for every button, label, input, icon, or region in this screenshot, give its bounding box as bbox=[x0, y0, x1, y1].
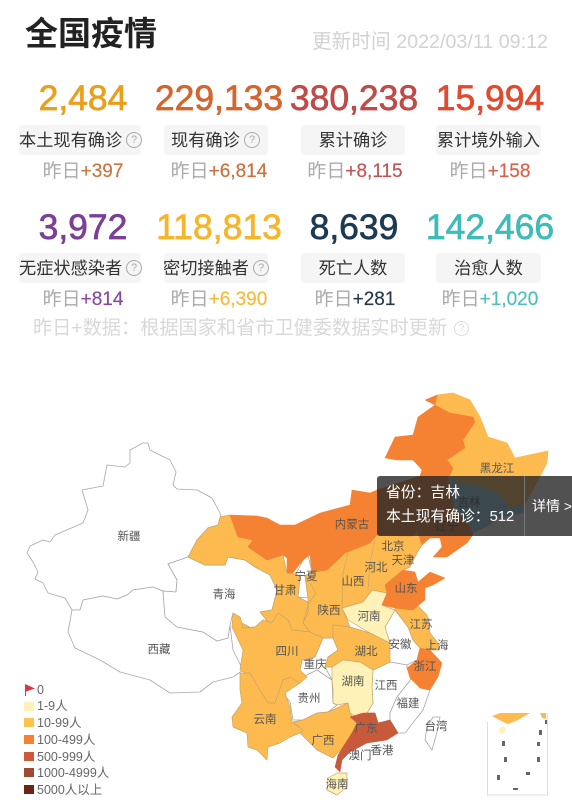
stat: imported: 15,994 bbox=[436, 78, 544, 118]
stat: local confirmed: ? bbox=[131, 134, 137, 146]
stat: deaths: 死亡人数 bbox=[319, 258, 387, 278]
province labels: 云南 bbox=[254, 712, 276, 726]
province labels: 安徽 bbox=[388, 637, 412, 651]
stat: close contacts: 密切接触者 bbox=[163, 258, 249, 278]
province labels: 吉林 bbox=[458, 495, 481, 509]
province labels: 广西 bbox=[312, 734, 334, 747]
province labels: 海南 bbox=[326, 777, 348, 791]
province labels bbox=[118, 462, 515, 791]
province: Zhejiang bbox=[407, 648, 442, 690]
province labels: 河南 bbox=[358, 609, 380, 623]
province: Henan bbox=[342, 590, 395, 643]
stat: local confirmed: 本土现有确诊 bbox=[19, 130, 122, 150]
province: Yunnan bbox=[232, 673, 303, 760]
province: Xinjiang bbox=[27, 443, 221, 610]
province labels: 重庆 bbox=[304, 657, 327, 671]
stat: deaths bbox=[301, 207, 405, 310]
province labels: 广东 bbox=[354, 722, 378, 735]
stat: cumulative confirmed: 累计确诊 bbox=[319, 130, 387, 150]
province labels: 香港 bbox=[370, 744, 394, 757]
legend: 1000-4999人 bbox=[37, 766, 109, 780]
province: Liaoning bbox=[400, 510, 473, 557]
legend: 100-499人 bbox=[37, 733, 95, 747]
province labels: 新疆 bbox=[118, 529, 141, 543]
province: Inner Mongolia bbox=[230, 395, 475, 573]
stat: close contacts: 118,813 bbox=[156, 207, 282, 247]
province labels: 山西 bbox=[342, 575, 364, 588]
province: Jilin bbox=[448, 477, 524, 533]
legend flag: 0 bbox=[25, 684, 35, 696]
province labels: 江苏 bbox=[410, 618, 432, 631]
stat: current confirmed: ? bbox=[249, 134, 255, 146]
update time: 更新时间 2022/03/11 09:12 bbox=[312, 31, 548, 53]
province labels: 河北 bbox=[364, 561, 388, 574]
province labels: 天津 bbox=[392, 554, 414, 567]
legend: 1-9人 bbox=[37, 699, 68, 713]
province labels: 江西 bbox=[374, 679, 398, 692]
province: Chongqing bbox=[300, 638, 338, 680]
province: Heilongjiang bbox=[435, 393, 548, 507]
stat: local confirmed: 昨日+397 bbox=[43, 161, 123, 182]
province: Northern plains (Shaanxi, Shanxi, Hebei, Beijing, Tianjin) bbox=[303, 530, 422, 638]
data note: 昨日+数据：根据国家和省市卫健委数据实时更新 bbox=[33, 318, 447, 339]
province: Fujian bbox=[390, 678, 430, 733]
stat: cumulative confirmed: 380,238 bbox=[290, 78, 418, 118]
stat: recovered bbox=[426, 207, 554, 310]
province: Ningxia bbox=[296, 555, 312, 598]
tooltip: Jilin bbox=[377, 476, 572, 536]
legend: 10-99人 bbox=[37, 716, 81, 730]
stat: local confirmed bbox=[19, 78, 142, 182]
province labels: 福建 bbox=[396, 696, 420, 710]
province: Taiwan bbox=[425, 717, 440, 750]
stat: asymptomatic: ? bbox=[131, 262, 137, 274]
province: Hainan bbox=[327, 773, 347, 795]
tooltip: Jilin: 省份：吉林 bbox=[386, 485, 460, 501]
province: Qinghai bbox=[163, 557, 277, 641]
stat: current confirmed: 昨日+6,814 bbox=[171, 161, 267, 182]
legend: 500-999人 bbox=[37, 750, 95, 764]
stat: close contacts: 昨日+6,390 bbox=[171, 289, 267, 310]
province labels: 上海 bbox=[426, 638, 449, 652]
tooltip: Jilin: 详情 > bbox=[532, 498, 572, 514]
province: Anhui bbox=[385, 610, 420, 665]
province: Gansu bbox=[188, 515, 310, 632]
province: Tibet bbox=[68, 587, 243, 693]
stat: imported: 昨日+158 bbox=[450, 161, 530, 182]
stat: deaths: 昨日+281 bbox=[315, 289, 395, 310]
stat: current confirmed: 现有确诊 bbox=[171, 130, 240, 150]
province labels: 四川 bbox=[276, 645, 298, 658]
stat: deaths: 8,639 bbox=[310, 207, 398, 247]
stat: local confirmed: 2,484 bbox=[39, 78, 127, 118]
province labels: 贵州 bbox=[298, 692, 320, 705]
province labels: 澳门 bbox=[348, 748, 372, 762]
province labels: 黑龙江 bbox=[480, 462, 515, 475]
data note: ? bbox=[459, 323, 464, 334]
stat: asymptomatic bbox=[19, 207, 142, 310]
province: Hubei bbox=[325, 625, 390, 670]
stat: current confirmed bbox=[155, 78, 283, 182]
province: Jiangxi bbox=[367, 662, 412, 723]
legend: 5000人以上 bbox=[37, 783, 102, 797]
province labels: 山东 bbox=[394, 582, 418, 595]
stat: asymptomatic: 无症状感染者 bbox=[19, 258, 122, 278]
province labels: 青海 bbox=[212, 587, 236, 601]
province labels: 辽宁 bbox=[436, 519, 458, 533]
province: Hunan bbox=[332, 660, 373, 717]
province labels: 内蒙古 bbox=[335, 517, 369, 531]
tooltip: Jilin: 本土现有确诊：512 bbox=[386, 509, 514, 525]
province labels: 台湾 bbox=[424, 719, 448, 733]
stat: close contacts bbox=[156, 207, 282, 310]
stat: cumulative confirmed bbox=[290, 78, 418, 182]
stat: imported bbox=[436, 78, 544, 182]
province labels: 宁夏 bbox=[294, 569, 318, 583]
stat: recovered: 昨日+1,020 bbox=[442, 289, 538, 310]
province labels: 陕西 bbox=[318, 603, 340, 617]
stat: asymptomatic: 3,972 bbox=[39, 207, 127, 247]
stat: cumulative confirmed: 昨日+8,115 bbox=[307, 161, 403, 182]
province: Shandong bbox=[382, 570, 445, 610]
legend bbox=[24, 683, 109, 797]
province labels: 湖北 bbox=[354, 644, 378, 658]
legend: 0 bbox=[37, 683, 44, 697]
stat: recovered: 142,466 bbox=[426, 207, 554, 247]
stat: asymptomatic: 昨日+814 bbox=[43, 289, 123, 310]
title: 全国疫情 bbox=[25, 15, 157, 52]
stat: current confirmed: 229,133 bbox=[155, 78, 283, 118]
province: Guangxi bbox=[293, 703, 357, 758]
province: Sichuan bbox=[232, 613, 323, 703]
province: Guizhou bbox=[283, 670, 337, 720]
province labels: 浙江 bbox=[414, 660, 437, 673]
province labels: 北京 bbox=[382, 539, 404, 553]
province labels: 湖南 bbox=[342, 674, 364, 688]
stat: imported: 累计境外输入 bbox=[437, 130, 540, 150]
province: Jiangsu and Shanghai bbox=[395, 605, 440, 650]
province labels: 甘肃 bbox=[274, 584, 296, 597]
province labels: 西藏 bbox=[148, 643, 171, 656]
inset: South China Sea bbox=[488, 713, 548, 795]
stat: close contacts: ? bbox=[258, 262, 264, 274]
province: Guangdong bbox=[335, 713, 398, 772]
stat: recovered: 治愈人数 bbox=[454, 258, 523, 278]
